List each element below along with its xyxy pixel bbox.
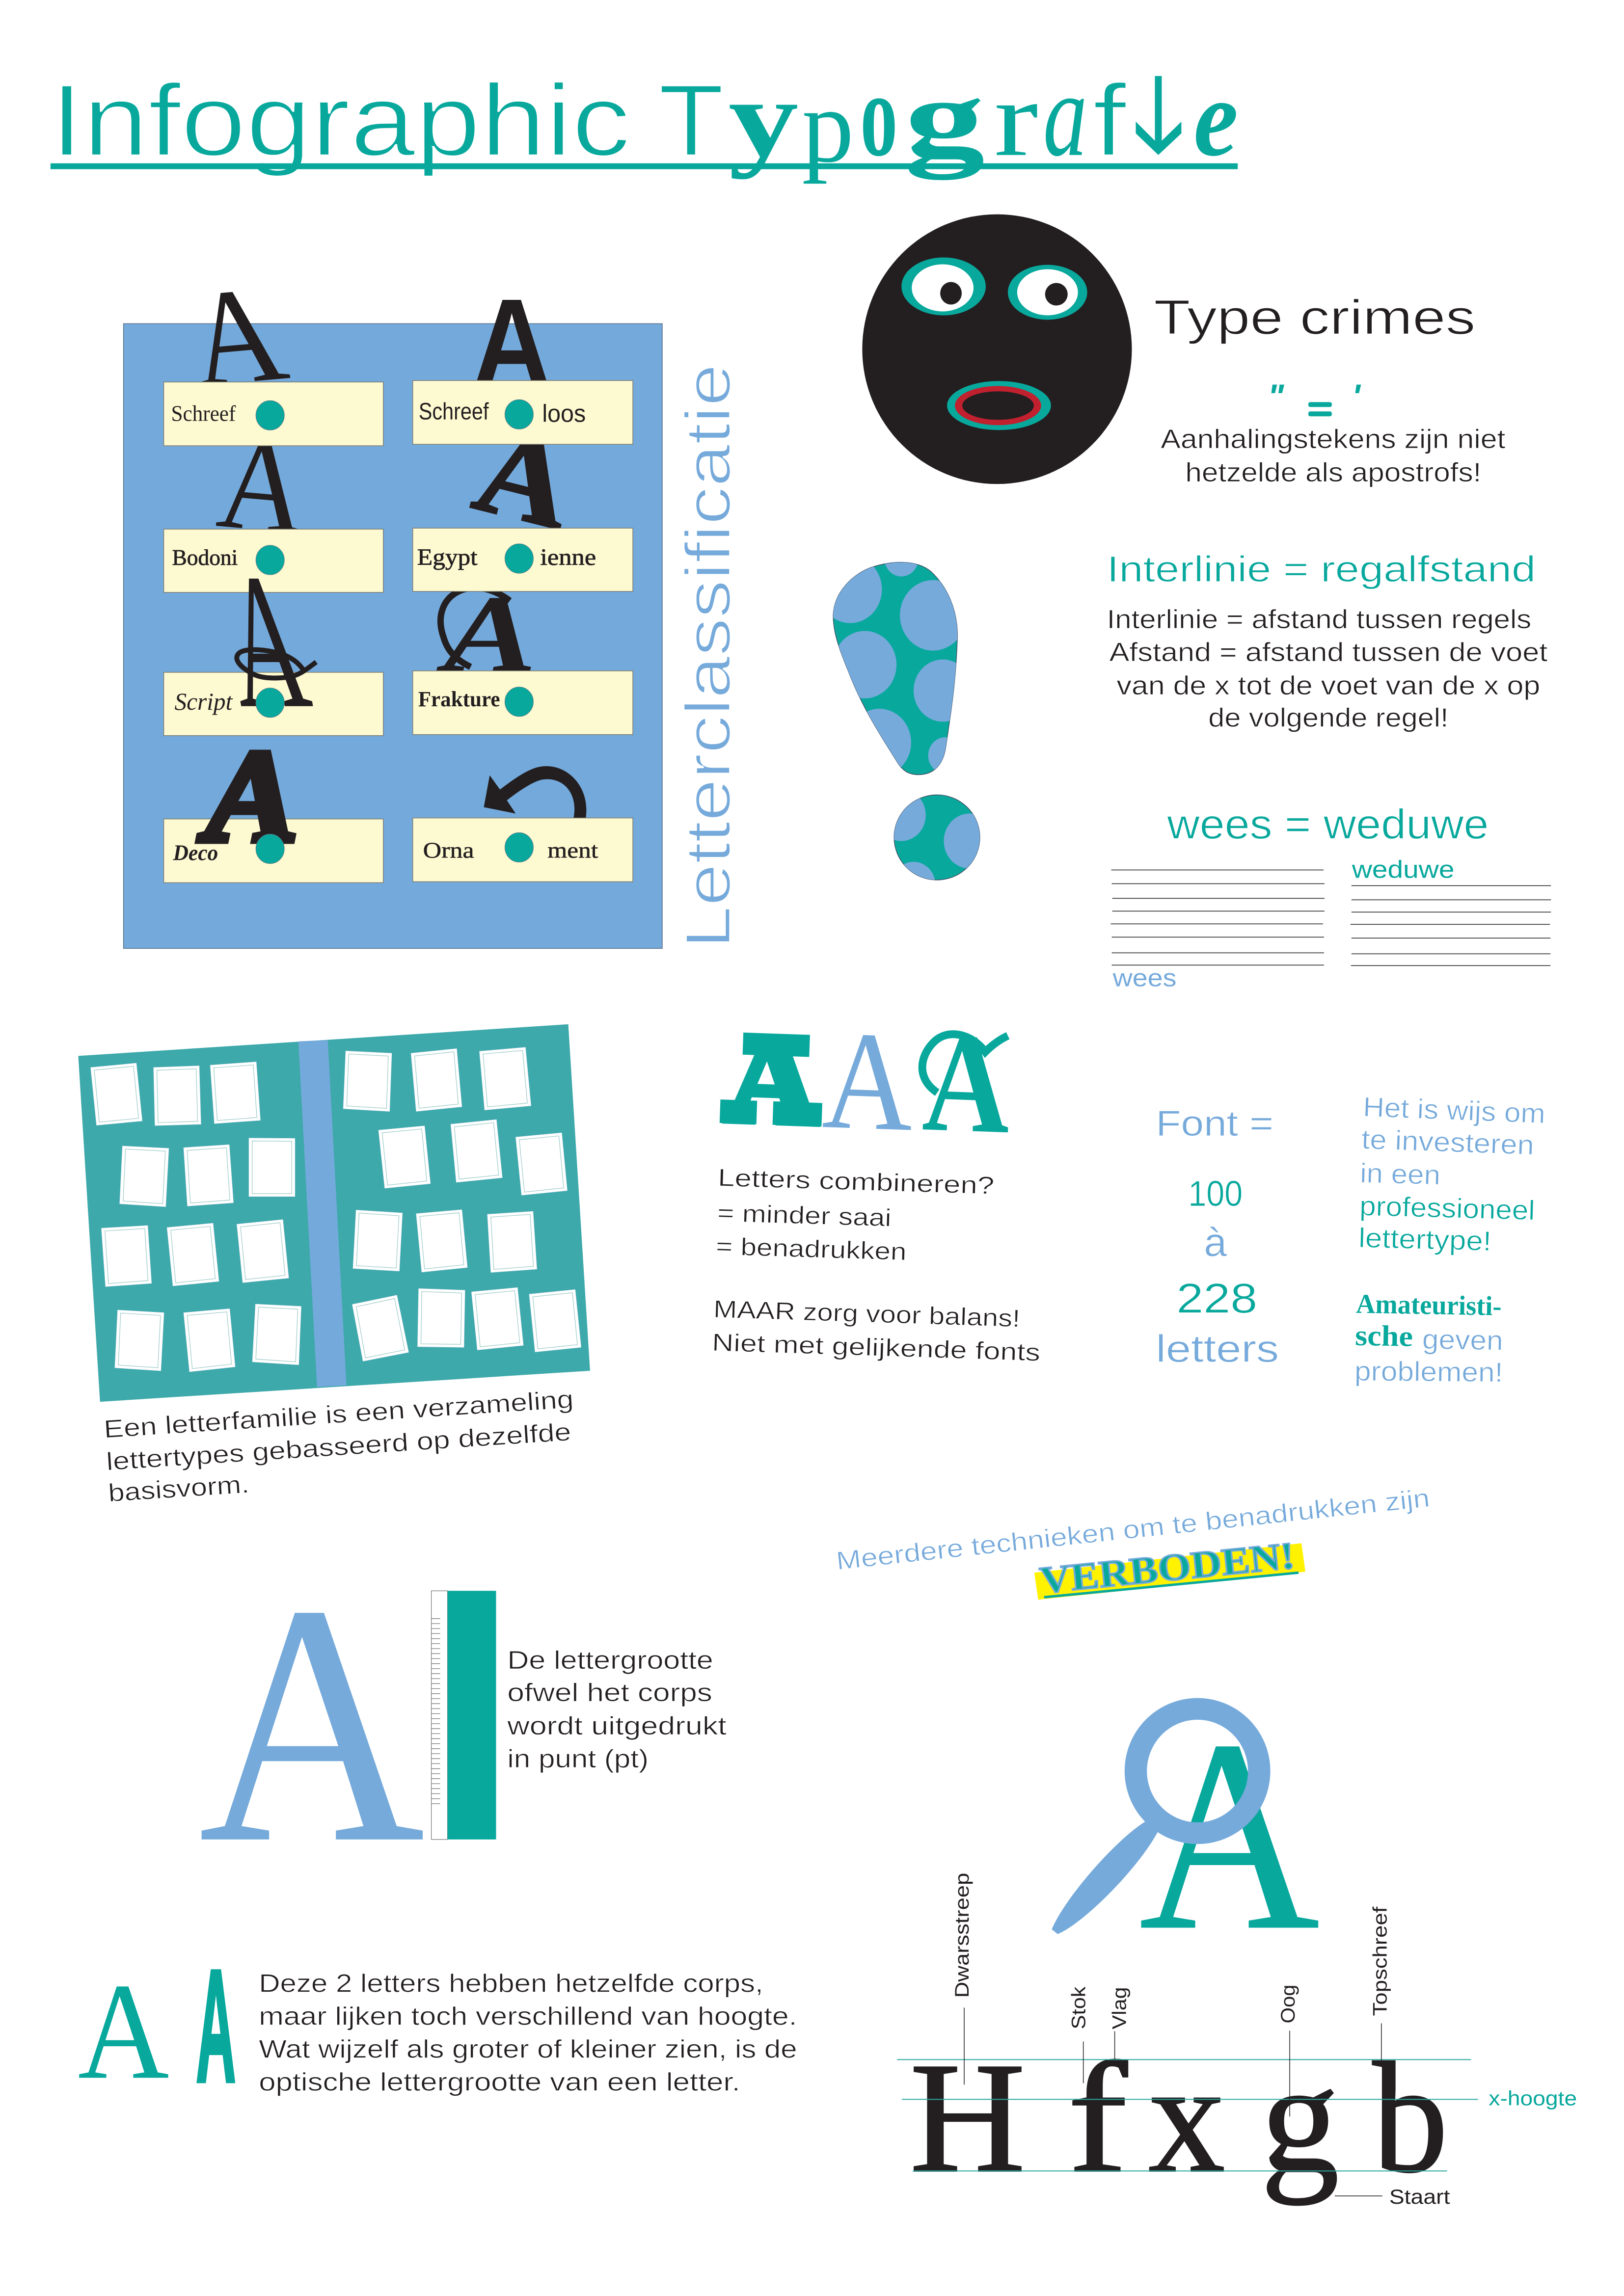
text: letterfamilie caption	[103, 1385, 574, 1507]
text: professioneel lettertype: te investeren	[1361, 1123, 1535, 1160]
diagram: letter anatomy: Staart	[1389, 2185, 1450, 2208]
diagram: letter anatomy: g	[1261, 2030, 1339, 2206]
text: professioneel lettertype: Het is wijs om	[1362, 1091, 1546, 1129]
quotes comparison: '	[1352, 377, 1361, 415]
callout: verboden: VERBODEN!	[1038, 1534, 1297, 1602]
dots	[256, 400, 533, 863]
label boxes	[163, 380, 633, 882]
diagram: weduwe lines: weduwe	[1352, 855, 1455, 883]
text: letterfamilie caption: Een letterfamilie is een verzameling	[103, 1385, 574, 1443]
quotes comparison: "	[1268, 377, 1284, 415]
box labels: Deco	[173, 840, 218, 865]
icon: magnifying glass	[1052, 1698, 1271, 1934]
box labels: ienne	[540, 544, 596, 570]
text: amateuristische: problemen!	[1354, 1356, 1503, 1388]
stat: font letters: 228	[1176, 1275, 1257, 1322]
text: interlinie body: de volgende regel!	[1208, 703, 1449, 733]
text: optische lettergrootte: Deze 2 letters hebben hetzelfde corps,	[259, 1970, 763, 1998]
diagram: letter anatomy: x-hoogte	[1489, 2086, 1577, 2109]
letter: large blue A: A	[198, 1534, 425, 1914]
text: letterfamilie caption: basisvorm.	[108, 1470, 250, 1507]
letter A script: A	[210, 534, 321, 748]
letter A bodoni: A	[212, 409, 313, 562]
text: interlinie body	[1107, 605, 1547, 733]
title: T	[658, 64, 724, 178]
text: amateuristische: geven	[1422, 1324, 1503, 1356]
title: g	[904, 56, 985, 180]
text: letters combineren: = benadrukken	[715, 1232, 907, 1265]
text: letters combineren: Niet met gelijkende fonts	[711, 1329, 1041, 1366]
text: aanhalingstekens: Aanhalingstekens zijn niet	[1161, 424, 1505, 454]
text: amateuristische: Amateuristi-	[1356, 1289, 1502, 1322]
diagram: letter anatomy: Topschreef	[1370, 1906, 1391, 2016]
text: letterfamilie caption: lettertypes gebasseerd op dezelfde	[106, 1417, 572, 1475]
box labels: loos	[542, 400, 586, 427]
diagram: letter anatomy: f	[1068, 2030, 1129, 2205]
ornament arrow	[484, 766, 586, 818]
heading: interlinie: Interlinie = regalfstand	[1107, 549, 1536, 589]
diagram: letter anatomy: Oog	[1277, 1985, 1299, 2023]
icon: face	[862, 214, 1132, 484]
text: professioneel lettertype	[1358, 1091, 1546, 1256]
letter A fraktur: A	[436, 573, 537, 695]
title: a	[1043, 48, 1087, 181]
text: lettergrootte: ofwel het corps	[507, 1679, 712, 1707]
diagram: letter anatomy: x	[1148, 2030, 1225, 2205]
stat: font letters: Font =	[1156, 1104, 1273, 1144]
text: optische lettergrootte: Wat wijzelf als groter of kleiner zien, is de	[259, 2035, 797, 2063]
title: f	[1093, 64, 1127, 178]
text: letters combineren: Letters combineren?	[717, 1164, 995, 1200]
box labels: Egypt	[417, 544, 478, 570]
illustration: stamp album	[78, 1024, 590, 1402]
title: r	[994, 59, 1038, 179]
diagram: letter anatomy: Stok	[1068, 1986, 1090, 2029]
box labels: Script	[174, 688, 233, 715]
stat: font letters: letters	[1156, 1327, 1279, 1370]
title	[51, 48, 1238, 185]
letter A deco: A	[197, 723, 298, 870]
text: letters combineren: MAAR zorg voor balans!	[713, 1295, 1021, 1332]
text: interlinie body: van de x tot de voet van de x op	[1117, 671, 1540, 700]
text: optische lettergrootte: maar lijken toch verschillend van hoogte.	[259, 2002, 797, 2030]
letter A schreef: A	[175, 257, 297, 415]
box labels	[171, 399, 598, 865]
text: professioneel lettertype: professioneel	[1359, 1190, 1535, 1226]
text: A	[196, 1937, 236, 2115]
text: lettergrootte: in punt (pt)	[507, 1745, 649, 1773]
letter A schreefloos: A	[473, 272, 551, 412]
title: o	[860, 48, 897, 181]
text: professioneel lettertype: in een	[1359, 1157, 1441, 1190]
text: amateuristische	[1354, 1289, 1503, 1388]
heading: type crimes: Type crimes	[1154, 290, 1475, 344]
diagram: wees lines: wees	[1112, 964, 1176, 991]
text: lettergrootte: wordt uitgedrukt	[507, 1712, 727, 1740]
letters: combination AAA	[719, 1002, 1013, 1163]
title: e	[1193, 57, 1238, 179]
icon: exclamation mark	[833, 561, 980, 881]
letter A script	[210, 534, 321, 748]
stat: font letters: à	[1204, 1220, 1227, 1265]
text: letters combineren: = minder saai	[717, 1199, 892, 1231]
box labels: Schreef	[419, 399, 489, 425]
title: Infographic	[51, 64, 630, 178]
box labels: Schreef	[171, 400, 236, 426]
letters: combination AAA: A	[920, 1003, 1013, 1163]
title: y	[729, 57, 799, 180]
diagram: letter anatomy: b	[1373, 2030, 1448, 2205]
stat: font letters	[1156, 1104, 1279, 1370]
text: optische lettergrootte: optische lettergrootte van een letter.	[259, 2068, 740, 2096]
text: amateuristische: sche	[1355, 1319, 1413, 1353]
text: lettergrootte	[507, 1646, 727, 1773]
letter A egyptienne: A	[463, 404, 585, 554]
box labels: Orna	[423, 837, 474, 863]
diagram: letter anatomy	[897, 1873, 1577, 2208]
vertical heading: Letterclassificatie: Letterclassificatie	[672, 364, 744, 948]
stat: font letters: 100	[1188, 1174, 1243, 1214]
text: aanhalingstekens	[1161, 424, 1505, 487]
box labels: ment	[547, 837, 598, 863]
text: aanhalingstekens: hetzelde als apostrofs!	[1185, 457, 1481, 487]
text: optische lettergrootte	[259, 1970, 797, 2096]
text: meerdere technieken: Meerdere technieken om te benadrukken zijn	[835, 1484, 1431, 1575]
text: lettergrootte: De lettergrootte	[507, 1646, 713, 1675]
diagram: letter anatomy: Vlag	[1109, 1987, 1131, 2029]
diagram: letter anatomy: H	[910, 2030, 1026, 2205]
letters: combination AAA: A	[724, 1009, 821, 1151]
quotes comparison	[1268, 377, 1361, 416]
title: p	[802, 69, 854, 185]
heading: wees = weduwe: wees = weduwe	[1166, 801, 1489, 848]
box labels: Bodoni	[172, 545, 238, 570]
diagram: letter anatomy: Dwarsstreep	[951, 1873, 973, 1998]
letters: combination AAA: A	[820, 1002, 916, 1161]
letter: teal serif A: A	[78, 1954, 169, 2108]
box labels: Frakture	[418, 687, 500, 711]
letter: teal A under magnifier: A	[1138, 1683, 1320, 1987]
text: letters combineren	[711, 1164, 1041, 1366]
text: interlinie body: Afstand = afstand tussen de voet	[1110, 638, 1547, 667]
panel: letterclassificatie	[124, 257, 662, 948]
ruler	[432, 1591, 496, 1840]
text: professioneel lettertype: lettertype!	[1358, 1222, 1492, 1256]
text: interlinie body: Interlinie = afstand tussen regels	[1107, 605, 1531, 634]
